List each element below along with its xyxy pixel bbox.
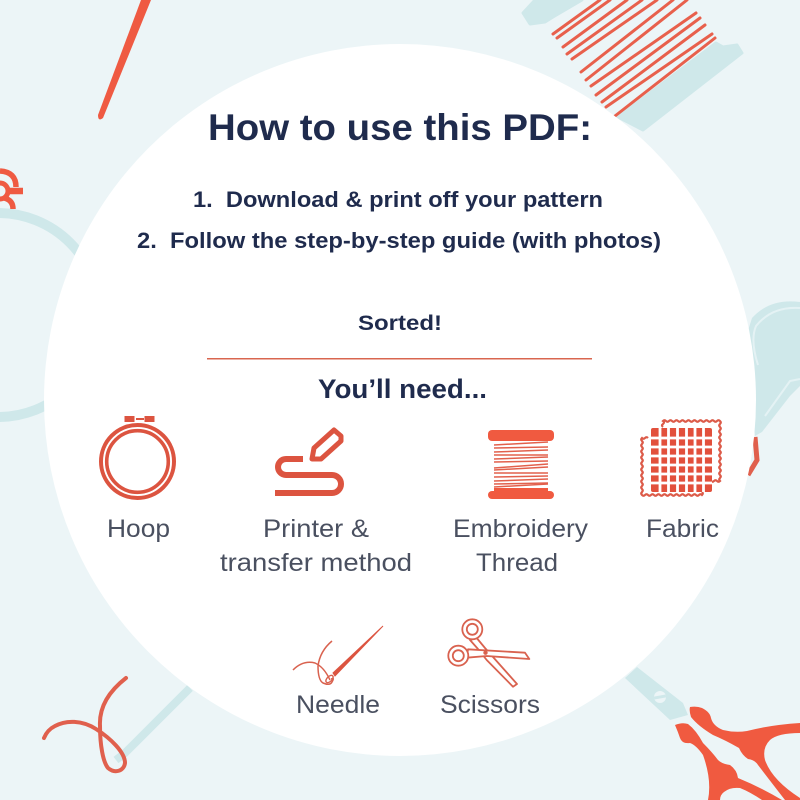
- label: printer and transfer method: Printer &: [263, 515, 369, 543]
- item: needle: [293, 626, 383, 719]
- white central circle panel: [44, 44, 756, 756]
- label: embroidery thread: [453, 515, 589, 577]
- icon: scissors: [448, 619, 529, 687]
- sorted text: Sorted!: [358, 312, 442, 335]
- label: embroidery thread: Thread: [476, 549, 558, 577]
- title: How to use this PDF:: [208, 107, 592, 148]
- label: printer and transfer method: transfer method: [220, 549, 412, 577]
- decorative embroidery hoop left: [0, 171, 100, 417]
- label: scissors: Scissors: [440, 691, 540, 719]
- decorative needle top left: [98, 0, 151, 119]
- item: fabric: [641, 420, 721, 543]
- decorative scissors bottom right: [625, 667, 800, 800]
- step 2 text: 2. Follow the step-by-step guide (with photos): [137, 228, 661, 253]
- icon: needle and thread: [293, 626, 383, 684]
- icon: pen transfer: [275, 430, 341, 493]
- step 1 text: 1. Download & print off your pattern: [193, 187, 603, 212]
- label: hoop: Hoop: [107, 515, 170, 543]
- decorative needle threader right: [745, 301, 800, 475]
- item: scissors: [440, 619, 540, 719]
- you'll need heading: You’ll need...: [318, 374, 487, 404]
- item: hoop: [101, 416, 174, 543]
- label: fabric: Fabric: [646, 515, 719, 543]
- decorative needle and thread bottom left: [44, 678, 190, 771]
- icon: thread spool: [488, 430, 554, 499]
- decorative thread spool top right: [523, 0, 742, 130]
- label: needle: Needle: [296, 691, 380, 719]
- label: embroidery thread: Embroidery: [453, 515, 589, 543]
- item: embroidery thread: [453, 430, 589, 577]
- icon: fabric swatches: [641, 420, 721, 496]
- item: printer and transfer method: [220, 430, 412, 577]
- label: printer and transfer method: [220, 515, 412, 577]
- icon: hoop: [101, 416, 174, 498]
